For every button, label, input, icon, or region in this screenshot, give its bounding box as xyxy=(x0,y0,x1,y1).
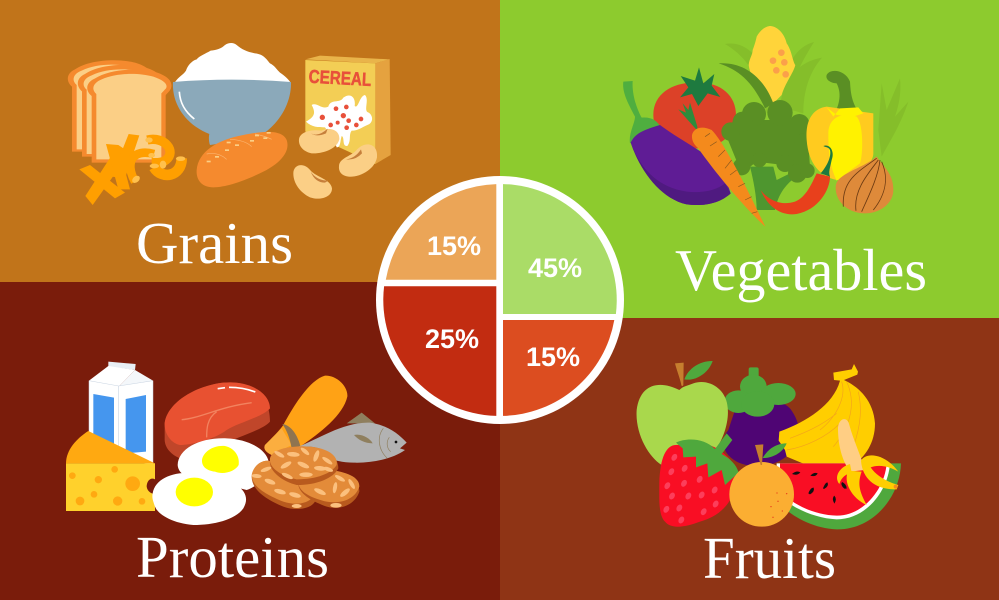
value: grains: 15% xyxy=(427,231,481,261)
value: fruits: 15% xyxy=(526,342,580,372)
icon: watermelon slice xyxy=(777,463,901,529)
icon: mangosteen xyxy=(723,367,799,466)
heading: grains: Grains xyxy=(136,210,293,276)
icon: peeled banana xyxy=(837,419,898,505)
value: vegetables: 45% xyxy=(528,253,582,283)
icon: strawberry xyxy=(659,433,739,527)
panel: grains background xyxy=(0,0,500,282)
icon: onion xyxy=(836,78,908,213)
icon: banana bunch xyxy=(779,364,875,465)
icon: bread slices xyxy=(68,60,171,163)
chart plate ring xyxy=(376,176,624,424)
icon: eggplant xyxy=(623,81,731,205)
pie chart xyxy=(376,176,624,424)
icon: tomato xyxy=(653,67,736,148)
heading: vegetables: Vegetables xyxy=(675,237,927,303)
panel: fruits background xyxy=(500,318,999,600)
icon: green apple xyxy=(637,361,728,465)
icon: corn xyxy=(719,26,822,113)
icon: cereal box xyxy=(293,56,391,199)
icon: milk carton xyxy=(89,362,153,465)
icon: carrot xyxy=(678,103,765,227)
slice: grains 15% xyxy=(386,184,496,280)
panel: proteins background xyxy=(0,282,500,600)
grains illustration xyxy=(68,43,391,205)
heading: fruits: Fruits xyxy=(703,525,836,591)
proteins illustration xyxy=(66,362,407,525)
icon: fish xyxy=(298,413,407,463)
icon: cheese xyxy=(66,431,155,511)
value: proteins: 25% xyxy=(425,324,479,354)
icon: bread roll xyxy=(197,132,288,187)
icon: chili xyxy=(761,145,833,214)
icon: fried eggs xyxy=(152,438,269,525)
icon: steak xyxy=(165,382,270,458)
fruits illustration xyxy=(637,361,901,529)
slice: proteins 25% xyxy=(383,286,496,416)
label: cereal: CEREAL xyxy=(308,66,372,90)
slice: vegetables 45% xyxy=(503,184,617,314)
icon: beans xyxy=(293,129,377,199)
icon: pasta xyxy=(79,134,185,205)
panel: vegetables background xyxy=(500,0,999,318)
vegetables illustration xyxy=(623,26,908,227)
heading: proteins: Proteins xyxy=(136,524,329,590)
icon: rice bowl xyxy=(173,43,291,145)
icon: sliced nut bread xyxy=(252,446,359,509)
icon: chicken leg xyxy=(264,376,347,455)
icon: bell pepper xyxy=(806,71,873,181)
icon: broccoli xyxy=(721,100,815,210)
icon: orange xyxy=(729,443,794,527)
slice: fruits 15% xyxy=(503,320,614,416)
